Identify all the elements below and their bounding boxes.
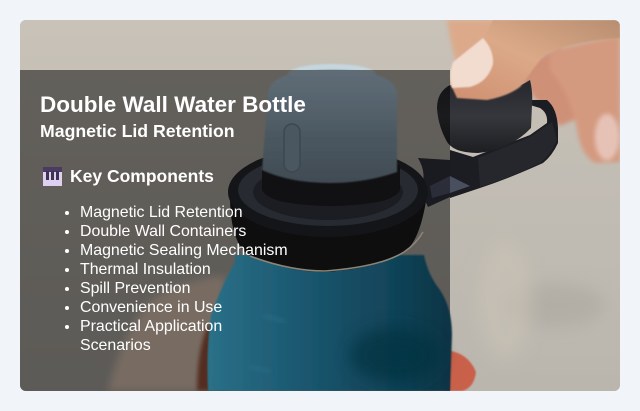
heading: key components: Key Components xyxy=(70,166,214,186)
list: key components: Magnetic Sealing Mechanism xyxy=(80,242,288,259)
list: key components: Scenarios xyxy=(80,337,151,354)
thumb xyxy=(450,20,620,100)
spout connecting lid to collar xyxy=(418,158,450,207)
lid loop strap xyxy=(450,100,558,198)
bottle body xyxy=(207,255,452,391)
red fingertip xyxy=(445,350,476,391)
magnetic lid knob xyxy=(437,80,532,153)
list: key components: Magnetic Lid Retention xyxy=(80,204,243,221)
dark text overlay panel xyxy=(20,70,450,391)
subtitle: Magnetic Lid Retention xyxy=(40,121,235,141)
collar flange xyxy=(228,147,428,237)
list: key components: Double Wall Containers xyxy=(80,223,246,240)
fingers behind thumb xyxy=(447,20,620,163)
text: title, subtitle and component list xyxy=(40,92,306,354)
list: key components xyxy=(65,204,288,354)
list: key components: Thermal Insulation xyxy=(80,261,211,278)
list: key components: Practical Application xyxy=(80,318,222,335)
icon: piano keyboard xyxy=(43,167,62,186)
holding hand under bottle xyxy=(108,276,225,391)
lid cap on bottle xyxy=(262,70,397,183)
list: key components: Convenience in Use xyxy=(80,299,222,316)
neck threads xyxy=(262,165,400,206)
list: key components: Spill Prevention xyxy=(80,280,190,297)
title: Double Wall Water Bottle xyxy=(40,92,306,117)
collar band xyxy=(230,195,427,272)
highlight on top of bottle cap xyxy=(288,64,376,84)
